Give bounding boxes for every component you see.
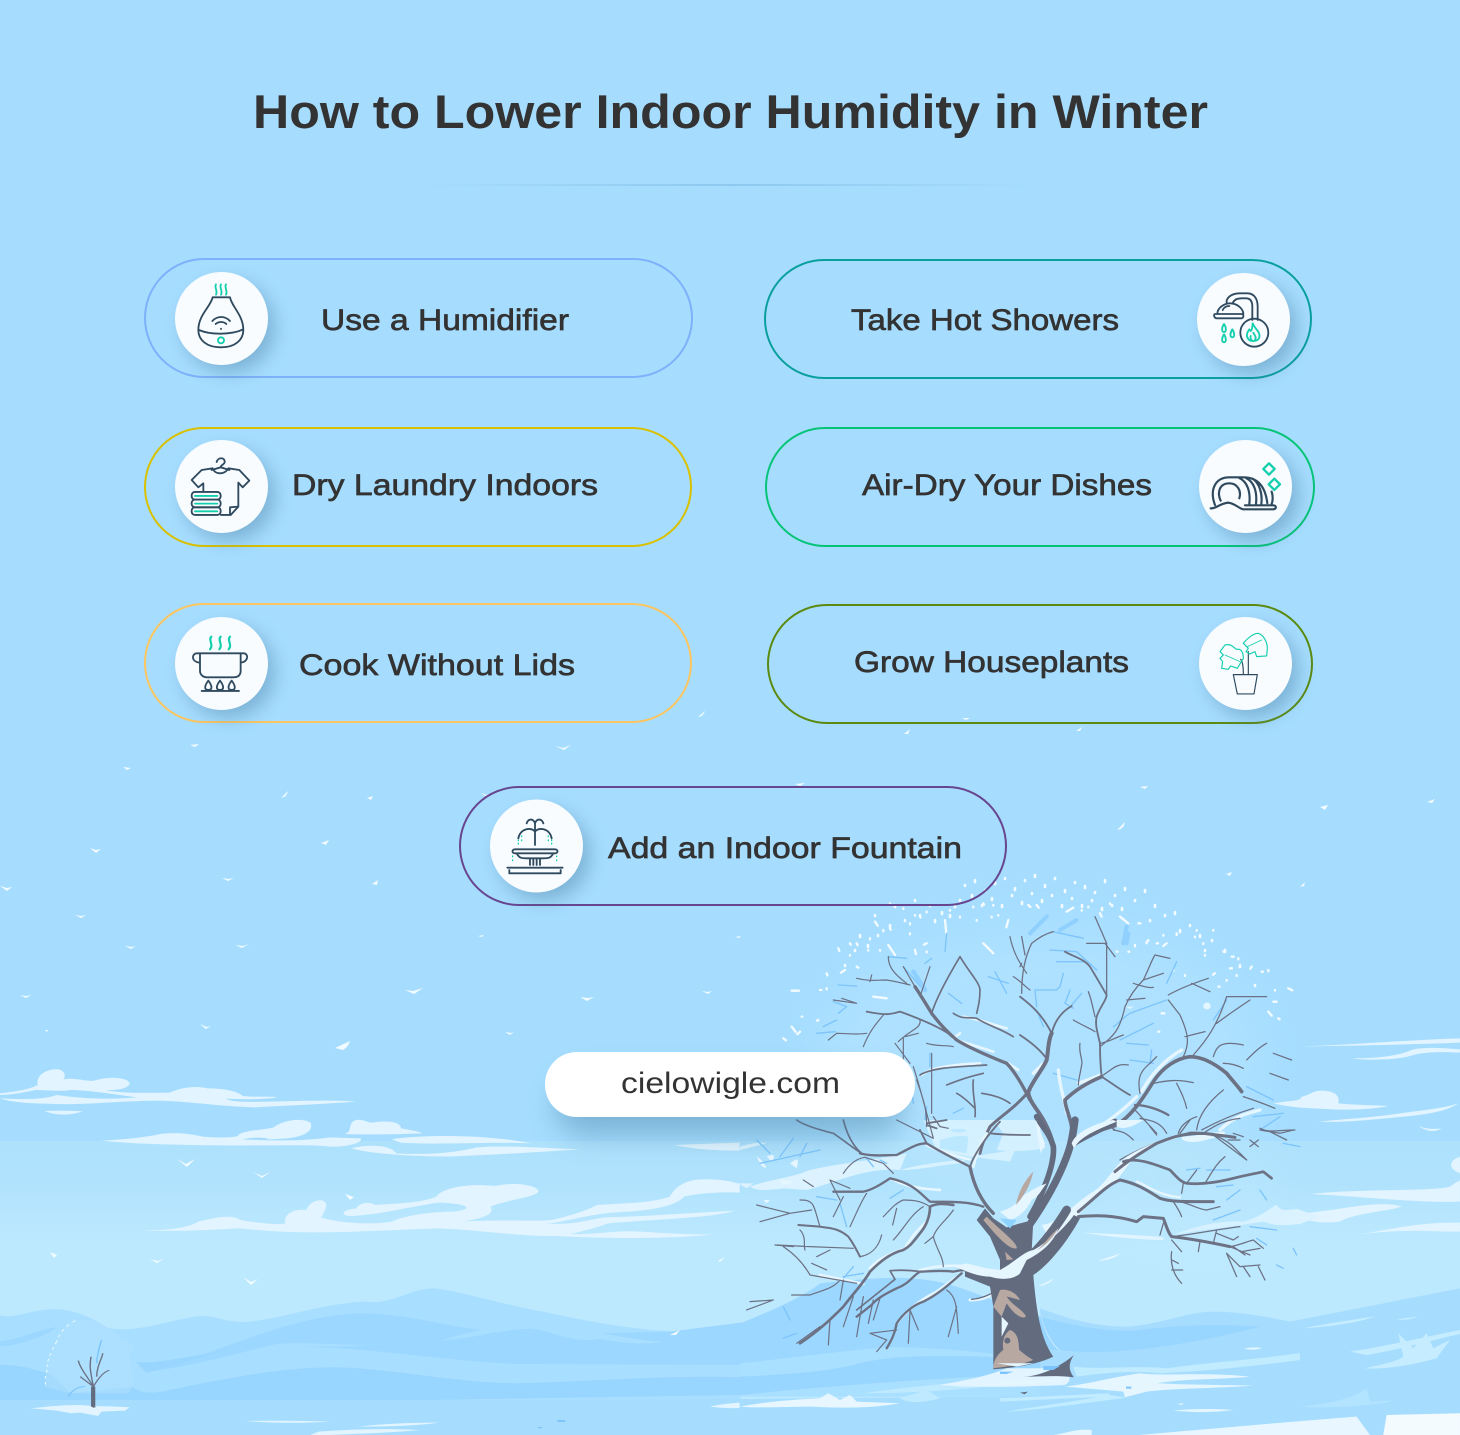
right limbs: [1078, 1133, 1272, 1247]
item: Cook Without Lids: [145, 604, 691, 722]
item: Grow Houseplants: [768, 605, 1312, 723]
loose snow strokes: [1038, 1233, 1163, 1286]
snow streaks under tree, left: [740, 1393, 900, 1408]
icon: laundry: [175, 440, 275, 541]
right ground streaks: [1303, 1316, 1460, 1369]
label: Take Hot Showers: [851, 304, 1119, 337]
hills under tree, light band: [740, 1347, 1040, 1397]
trunk limbs: [1028, 1117, 1115, 1253]
limbs: [747, 1120, 1030, 1352]
hill side patch: [136, 1350, 226, 1373]
title: How to Lower Indoor Humidity in Winter: [253, 86, 1208, 139]
tree top-left quadrant: [783, 903, 1030, 1153]
clouds left: [0, 1069, 740, 1435]
item: Take Hot Showers: [765, 260, 1311, 378]
crown top snow flecks: [845, 875, 1255, 986]
background: landscape: [0, 1038, 1460, 1435]
cloud pieces behind branches, right: [1173, 1205, 1320, 1235]
icon: fountain: [490, 800, 590, 901]
hills under tree: [740, 1278, 1040, 1363]
small tree, bottom left: [31, 1320, 565, 1428]
trunk: [965, 1208, 1080, 1369]
hills: distant left range: [0, 1288, 741, 1435]
crown snow flecks: [1028, 903, 1292, 1032]
snow streaks under tree, right: [1000, 1353, 1300, 1412]
tree bottom-left quadrant: [747, 1120, 1030, 1352]
cloud pieces behind tree: [738, 1120, 997, 1190]
limb snow: [1033, 1050, 1260, 1147]
icon: dish rack: [1199, 440, 1299, 541]
label: Use a Humidifier: [321, 304, 569, 337]
tree: large winter tree: [747, 875, 1300, 1394]
label: Air-Dry Your Dishes: [862, 469, 1152, 502]
crown snow flecks: [783, 903, 1008, 1040]
bark patches: [983, 1172, 1058, 1368]
limb snow: [820, 1133, 987, 1323]
item: Dry Laundry Indoors: [145, 428, 691, 546]
snow ground right: [1140, 1417, 1370, 1435]
title divider: [420, 184, 1040, 186]
tree top-right quadrant: [1020, 903, 1300, 1160]
icon: boiling pot: [175, 617, 275, 718]
icon: hot shower: [1197, 273, 1297, 374]
hills: mid darker range: [0, 1313, 741, 1372]
item: Add an Indoor Fountain: [460, 787, 1006, 905]
website pill: [545, 1052, 915, 1135]
right clouds: [1273, 1038, 1460, 1235]
icon: humidifier: [175, 272, 275, 373]
tree bottom-right quadrant: [955, 1117, 1297, 1394]
label: Cook Without Lids: [299, 649, 575, 682]
item: Air-Dry Your Dishes: [766, 428, 1314, 546]
blue twigs: [757, 1138, 903, 1338]
trunk base: [1023, 1355, 1074, 1377]
limb snow and blue twigs: [1187, 1168, 1297, 1268]
limbs: [828, 937, 1030, 1153]
website text: cielowigle.com: [621, 1067, 840, 1100]
label: Grow Houseplants: [854, 646, 1129, 679]
limbs: [1020, 917, 1293, 1160]
right hill band: [1040, 1288, 1460, 1407]
icon: houseplant: [1199, 617, 1299, 718]
snowflakes: [0, 711, 1435, 1335]
hills under tree, dark band: [740, 1356, 1040, 1395]
crown haze: [820, 930, 1280, 1250]
ground: [0, 1392, 1460, 1435]
trunk snow: [955, 1228, 1058, 1279]
item: Use a Humidifier: [145, 259, 692, 377]
hills: near range: [0, 1365, 741, 1400]
hills: light ribbon: [495, 1324, 663, 1343]
blue twigs: [1035, 932, 1300, 1147]
right hill shadow: [1038, 1317, 1260, 1352]
label: Add an Indoor Fountain: [608, 832, 962, 865]
label: Dry Laundry Indoors: [292, 469, 598, 502]
limb snow: [922, 1017, 1018, 1075]
blue twigs: [817, 933, 1008, 1120]
